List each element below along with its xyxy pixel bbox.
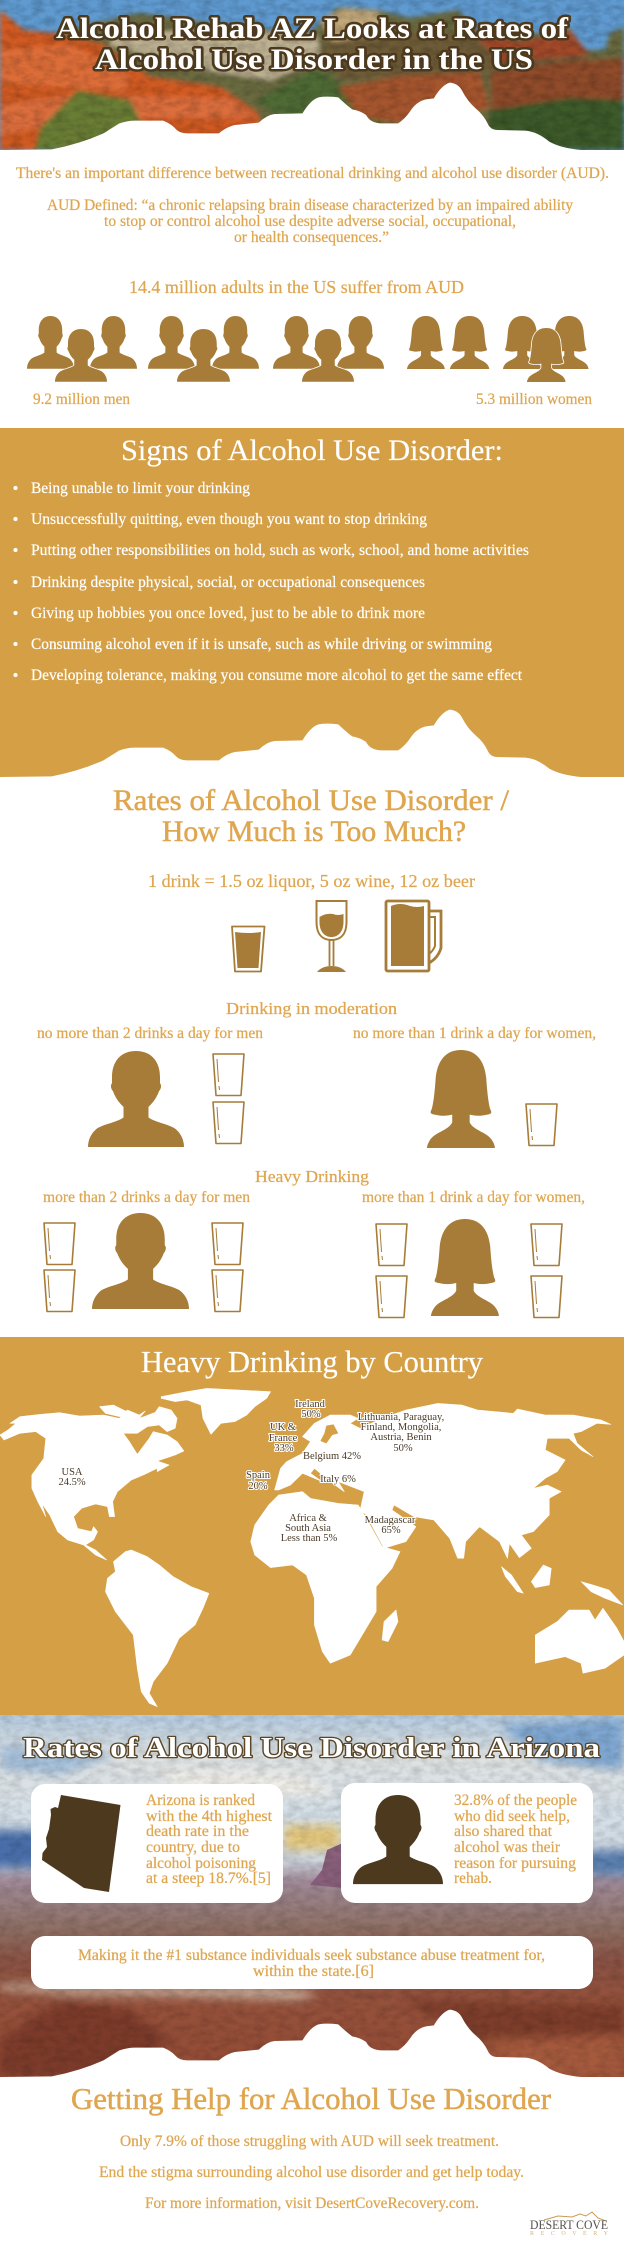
panel: arizona ranking card: [31, 1784, 283, 1903]
panel: number one substance card: [31, 1936, 593, 1989]
map labels: 33%: [274, 1443, 294, 1454]
intro text block: AUD Defined: “a chronic relapsing brain disease characterized by an impaired ability: [47, 197, 573, 214]
icons: groups of women: [407, 316, 588, 382]
list of signs: Drinking despite physical, social, or occupational consequences: [31, 574, 425, 591]
drink definition: 1 drink = 1.5 oz liquor, 5 oz wine, 12 oz beer: [148, 871, 475, 891]
map labels: 24.5%: [58, 1477, 86, 1488]
map labels: France: [269, 1433, 298, 1444]
list of signs: Consuming alcohol even if it is unsafe, such as while driving or swimming: [31, 636, 492, 653]
title: Alcohol Use Disorder in the US: [95, 44, 533, 76]
map labels: South Asia: [285, 1523, 331, 1534]
label: heavy men: more than 2 drinks a day for men: [43, 1189, 250, 1206]
closing text block: Only 7.9% of those struggling with AUD will seek treatment.: [120, 2133, 499, 2150]
label: moderation women: no more than 1 drink a day for women,: [353, 1025, 596, 1042]
card text: death rate in the: [146, 1823, 249, 1840]
card text: rehab.: [454, 1870, 492, 1887]
panel: seeking help card: [341, 1783, 593, 1903]
butte: [310, 1844, 341, 1888]
icon: beer mug: [386, 901, 441, 971]
card text: at a steep 18.7%.[5]: [146, 1870, 271, 1887]
map labels: 65%: [381, 1525, 401, 1536]
map labels: 50%: [301, 1409, 321, 1420]
logo: desert cove recovery: [530, 2212, 609, 2237]
title: [56, 13, 569, 76]
heading: heavy drinking by country: Heavy Drinking by Country: [141, 1344, 483, 1379]
logo: desert cove recovery: DESERT COVE: [530, 2217, 608, 2232]
icon: arizona state shape: [42, 1795, 120, 1892]
icon: wine glass: [316, 901, 346, 972]
card text: who did seek help,: [454, 1808, 570, 1825]
intro text block: [16, 165, 609, 246]
closing text block: End the stigma surrounding alcohol use disorder and get help today.: [99, 2164, 524, 2181]
card text: with the 4th highest: [146, 1808, 273, 1825]
card text: [146, 1792, 273, 1887]
list of signs: Giving up hobbies you once loved, just to be able to drink more: [31, 605, 425, 622]
intro text block: There's an important difference between recreational drinking and alcohol use disorder (AUD).: [16, 165, 609, 182]
map labels: Ireland: [295, 1399, 326, 1410]
card text: alcohol poisoning: [146, 1855, 256, 1872]
map labels: Italy 6%: [320, 1474, 356, 1485]
card text: Arizona is ranked: [146, 1792, 255, 1809]
map labels: Africa &: [289, 1513, 327, 1524]
label: men: 9.2 million men: [33, 391, 130, 408]
icon: man, many drinks: [44, 1213, 243, 1312]
heading: rates / how much is too much: Rates of Alcohol Use Disorder /: [113, 784, 510, 817]
arizona photo: monument valley: [0, 1715, 624, 2077]
list of signs: Being unable to limit your drinking: [31, 480, 250, 497]
title: Alcohol Rehab AZ Looks at Rates of: [56, 13, 569, 45]
world map: [0, 1388, 624, 1707]
card text: 32.8% of the people: [454, 1792, 577, 1809]
icon: woman, many drinks: [376, 1219, 562, 1318]
heading: drinking in moderation: Drinking in moderation: [226, 999, 398, 1018]
white mountain silhouette under header: [0, 83, 624, 167]
map labels: 50%: [393, 1443, 413, 1454]
logo: desert cove recovery: R E C O V E R Y: [530, 2231, 609, 2237]
heading: signs: Signs of Alcohol Use Disorder:: [121, 434, 503, 467]
closing text block: For more information, visit DesertCoveRecovery.com.: [145, 2195, 479, 2212]
panel: signs of alcohol use disorder: [0, 428, 624, 794]
heading: rates in arizona: Rates of Alcohol Use Disorder in Arizona: [23, 1732, 601, 1764]
map labels: UK &: [270, 1422, 296, 1433]
map labels: Belgium 42%: [303, 1451, 361, 1462]
card text: reason for pursuing: [454, 1855, 576, 1872]
icon: woman, one drink: [427, 1050, 557, 1148]
heading: rates / how much is too much: How Much is Too Much?: [162, 815, 466, 848]
map labels: Lithuania, Paraguay,: [358, 1412, 444, 1423]
heading: rates / how much is too much: [113, 784, 510, 848]
map labels: Madagascar: [365, 1515, 416, 1526]
map labels: [58, 1399, 444, 1544]
map labels: Finland, Mongolia,: [361, 1422, 441, 1433]
panel: number one substance card: within the state.[6]: [253, 1963, 374, 1980]
statistic heading: 14.4 million: 14.4 million adults in the US suffer from AUD: [129, 277, 464, 297]
card text: [454, 1792, 577, 1887]
icon: man, two drinks: [88, 1051, 244, 1147]
map labels: Less than 5%: [281, 1533, 338, 1544]
list of signs: Developing tolerance, making you consume more alcohol to get the same effect: [31, 667, 523, 684]
intro text block: or health consequences.”: [234, 229, 389, 246]
panel: number one substance card: Making it the #1 substance individuals seek substance abuse treatment for,: [78, 1947, 545, 1964]
icon: person silhouette: [353, 1795, 443, 1884]
heading: heavy drinking: Heavy Drinking: [255, 1167, 370, 1186]
icons: groups of men: [27, 316, 384, 382]
card text: also shared that: [454, 1823, 553, 1840]
white mountain silhouette under arizona photo: [0, 2010, 624, 2094]
header photo: red rock canyon: [0, 0, 624, 150]
icon: liquor glass: [232, 926, 264, 972]
panel: heavy drinking by country: [0, 1337, 624, 1715]
list of signs: [14, 480, 529, 684]
map labels: 20%: [248, 1481, 268, 1492]
label: moderation men: no more than 2 drinks a day for men: [37, 1025, 263, 1042]
label: heavy women: more than 1 drink a day for women,: [362, 1189, 585, 1206]
card text: country, due to: [146, 1839, 240, 1856]
card text: alcohol was their: [454, 1839, 561, 1856]
heading: getting help: Getting Help for Alcohol Use Disorder: [71, 2081, 552, 2116]
closing text block: [99, 2133, 524, 2212]
map labels: Austria, Benin: [370, 1432, 432, 1443]
label: women: 5.3 million women: [476, 391, 592, 408]
intro text block: to stop or control alcohol use despite adverse social, occupational,: [104, 213, 516, 230]
list of signs: Putting other responsibilities on hold, such as work, school, and home activities: [31, 542, 529, 559]
list of signs: Unsuccessfully quitting, even though you want to stop drinking: [31, 511, 427, 528]
map labels: Spain: [246, 1470, 271, 1481]
map labels: USA: [61, 1467, 83, 1478]
